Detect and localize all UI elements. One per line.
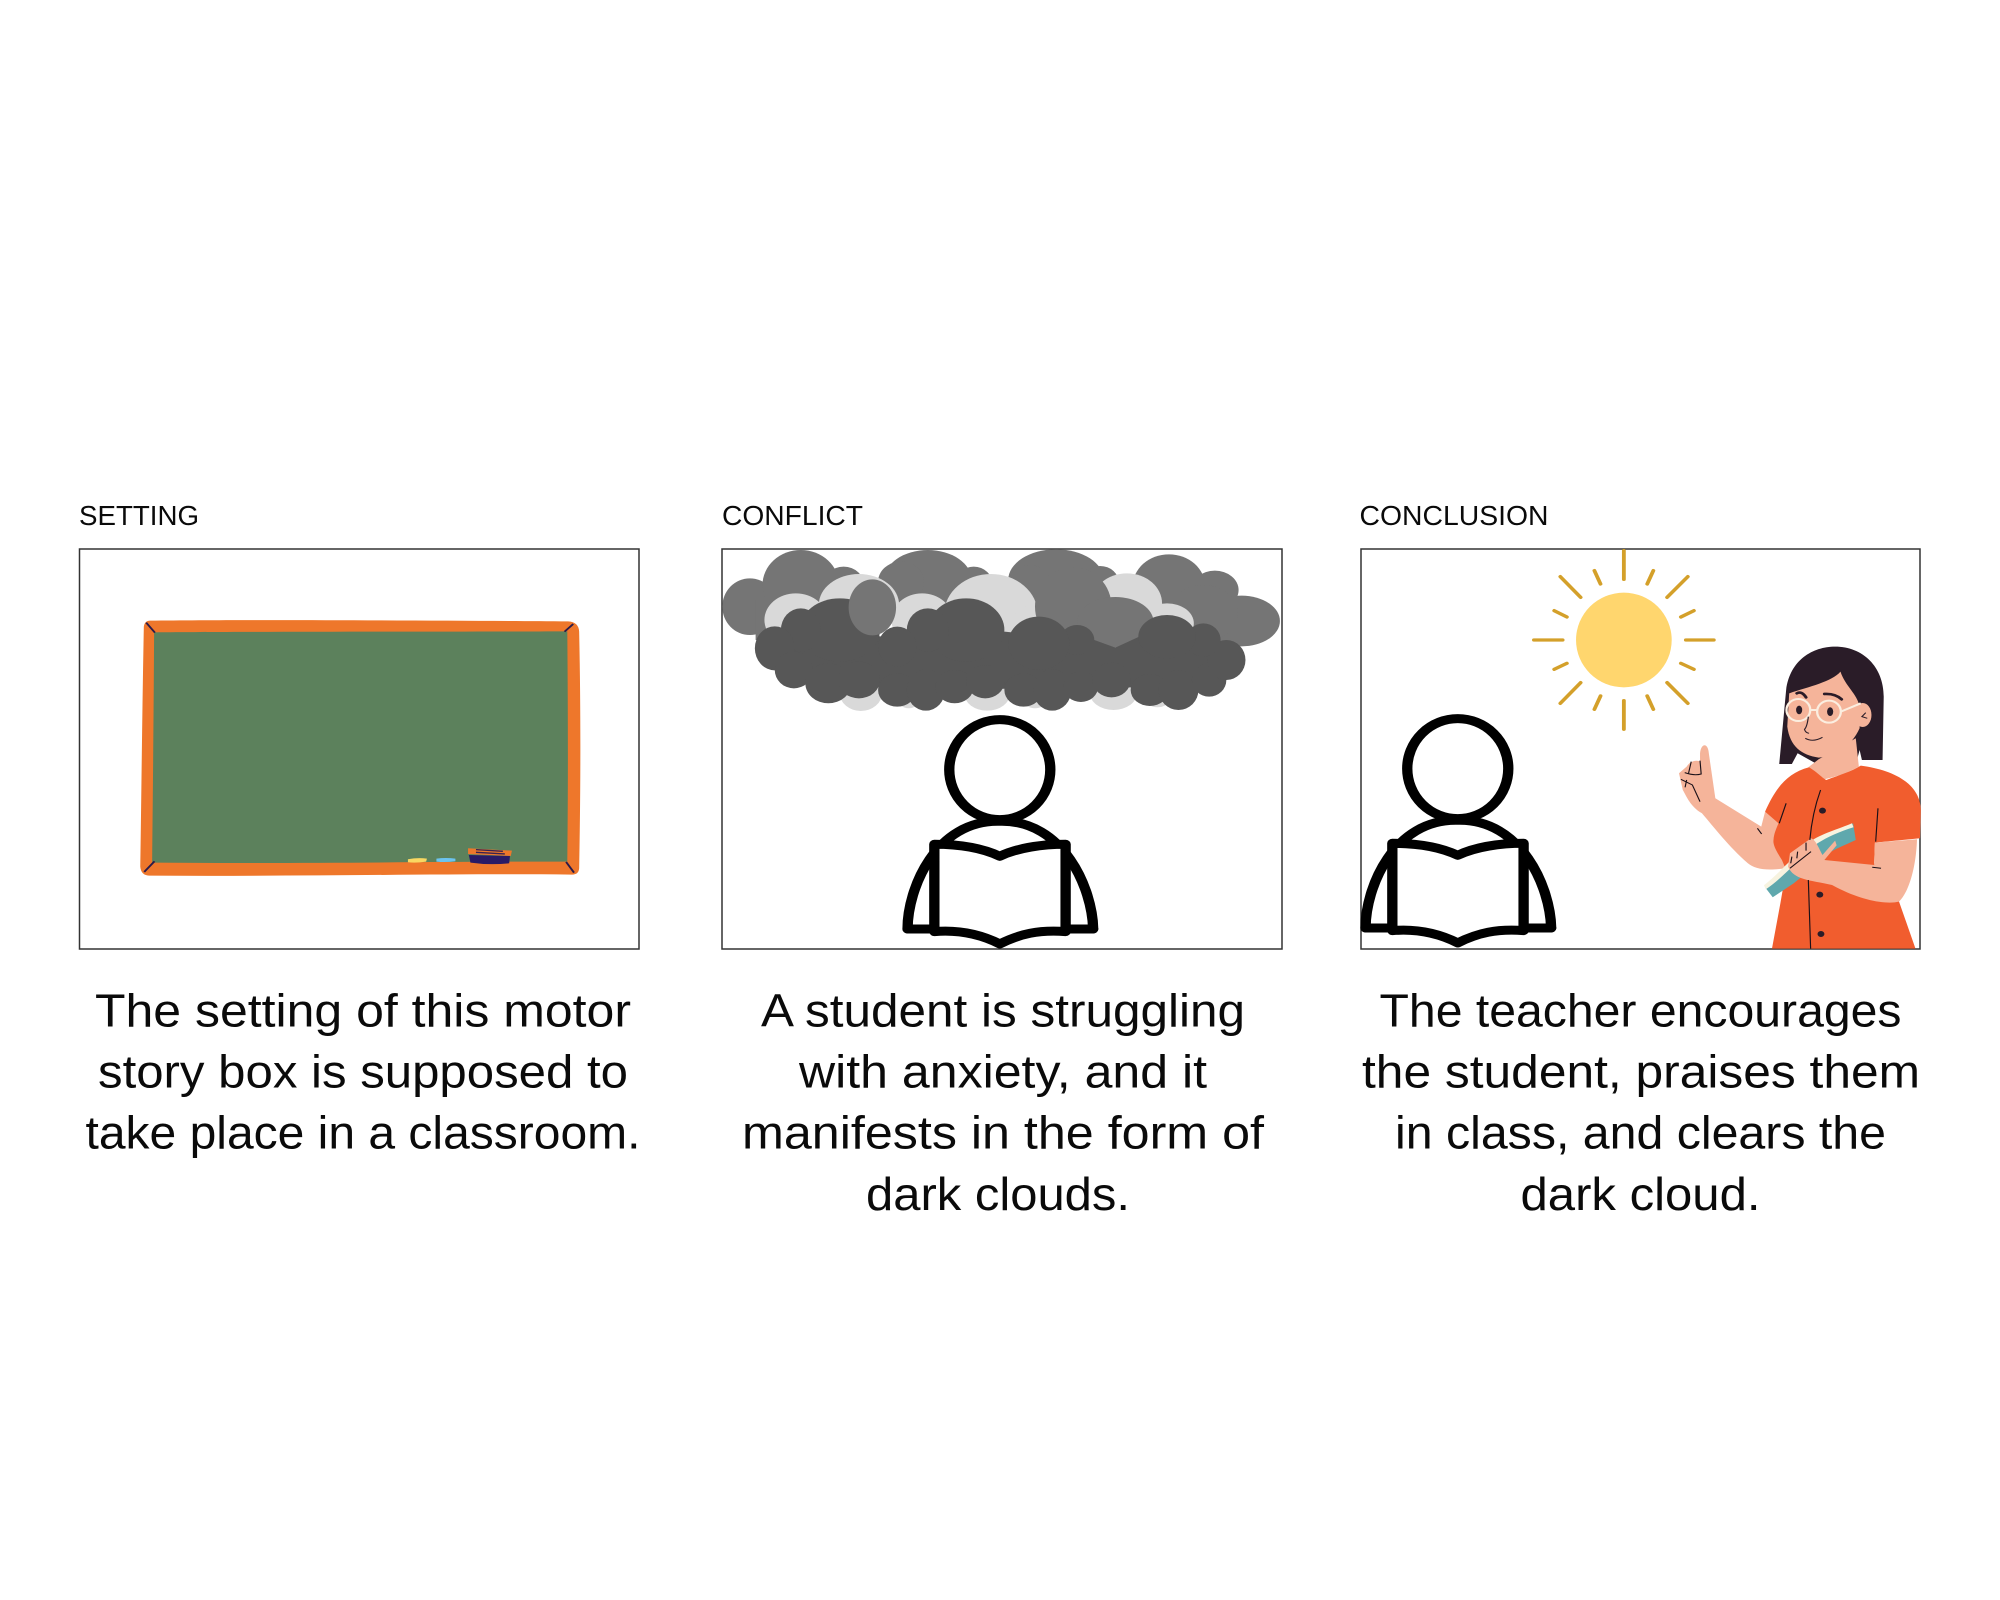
panel: setting <box>79 500 640 1158</box>
icon: dark clouds <box>722 549 1280 711</box>
panel: conclusion <box>1360 500 1921 1220</box>
text block: conclusion description: dark cloud. <box>1520 1168 1760 1220</box>
icon: student reading a book <box>908 720 1093 944</box>
text block: setting description: story box is supposed to <box>98 1046 628 1098</box>
text block: conclusion description: in class, and clears the <box>1395 1106 1886 1158</box>
text block: conflict description <box>742 984 1264 1220</box>
text block: conflict description: A student is struggling <box>761 984 1245 1036</box>
heading: setting: SETTING <box>79 500 199 531</box>
text block: setting description <box>86 984 640 1158</box>
text block: conflict description: manifests in the form of <box>742 1106 1264 1158</box>
illustration frame: conflict <box>722 549 1282 949</box>
text block: conflict description: with anxiety, and it <box>798 1046 1207 1098</box>
text block: setting description: The setting of this motor <box>95 984 631 1036</box>
heading: conflict: CONFLICT <box>722 500 863 531</box>
icon: green chalkboard <box>140 620 580 876</box>
panel: conflict <box>722 500 1282 1220</box>
heading: conclusion: CONCLUSION <box>1360 500 1548 531</box>
icon: student reading a book <box>1366 719 1551 943</box>
text block: conclusion description: the student, praises them <box>1362 1046 1920 1098</box>
illustration frame: setting <box>80 549 639 949</box>
text block: setting description: take place in a classroom. <box>86 1106 640 1158</box>
icon: sun <box>1534 551 1714 729</box>
icon: teacher pointing up <box>1679 647 1921 949</box>
text block: conclusion description: The teacher encourages <box>1380 984 1902 1036</box>
text block: conclusion description <box>1362 984 1920 1220</box>
text block: conflict description: dark clouds. <box>866 1168 1130 1220</box>
illustration frame: conclusion <box>1361 549 1920 949</box>
